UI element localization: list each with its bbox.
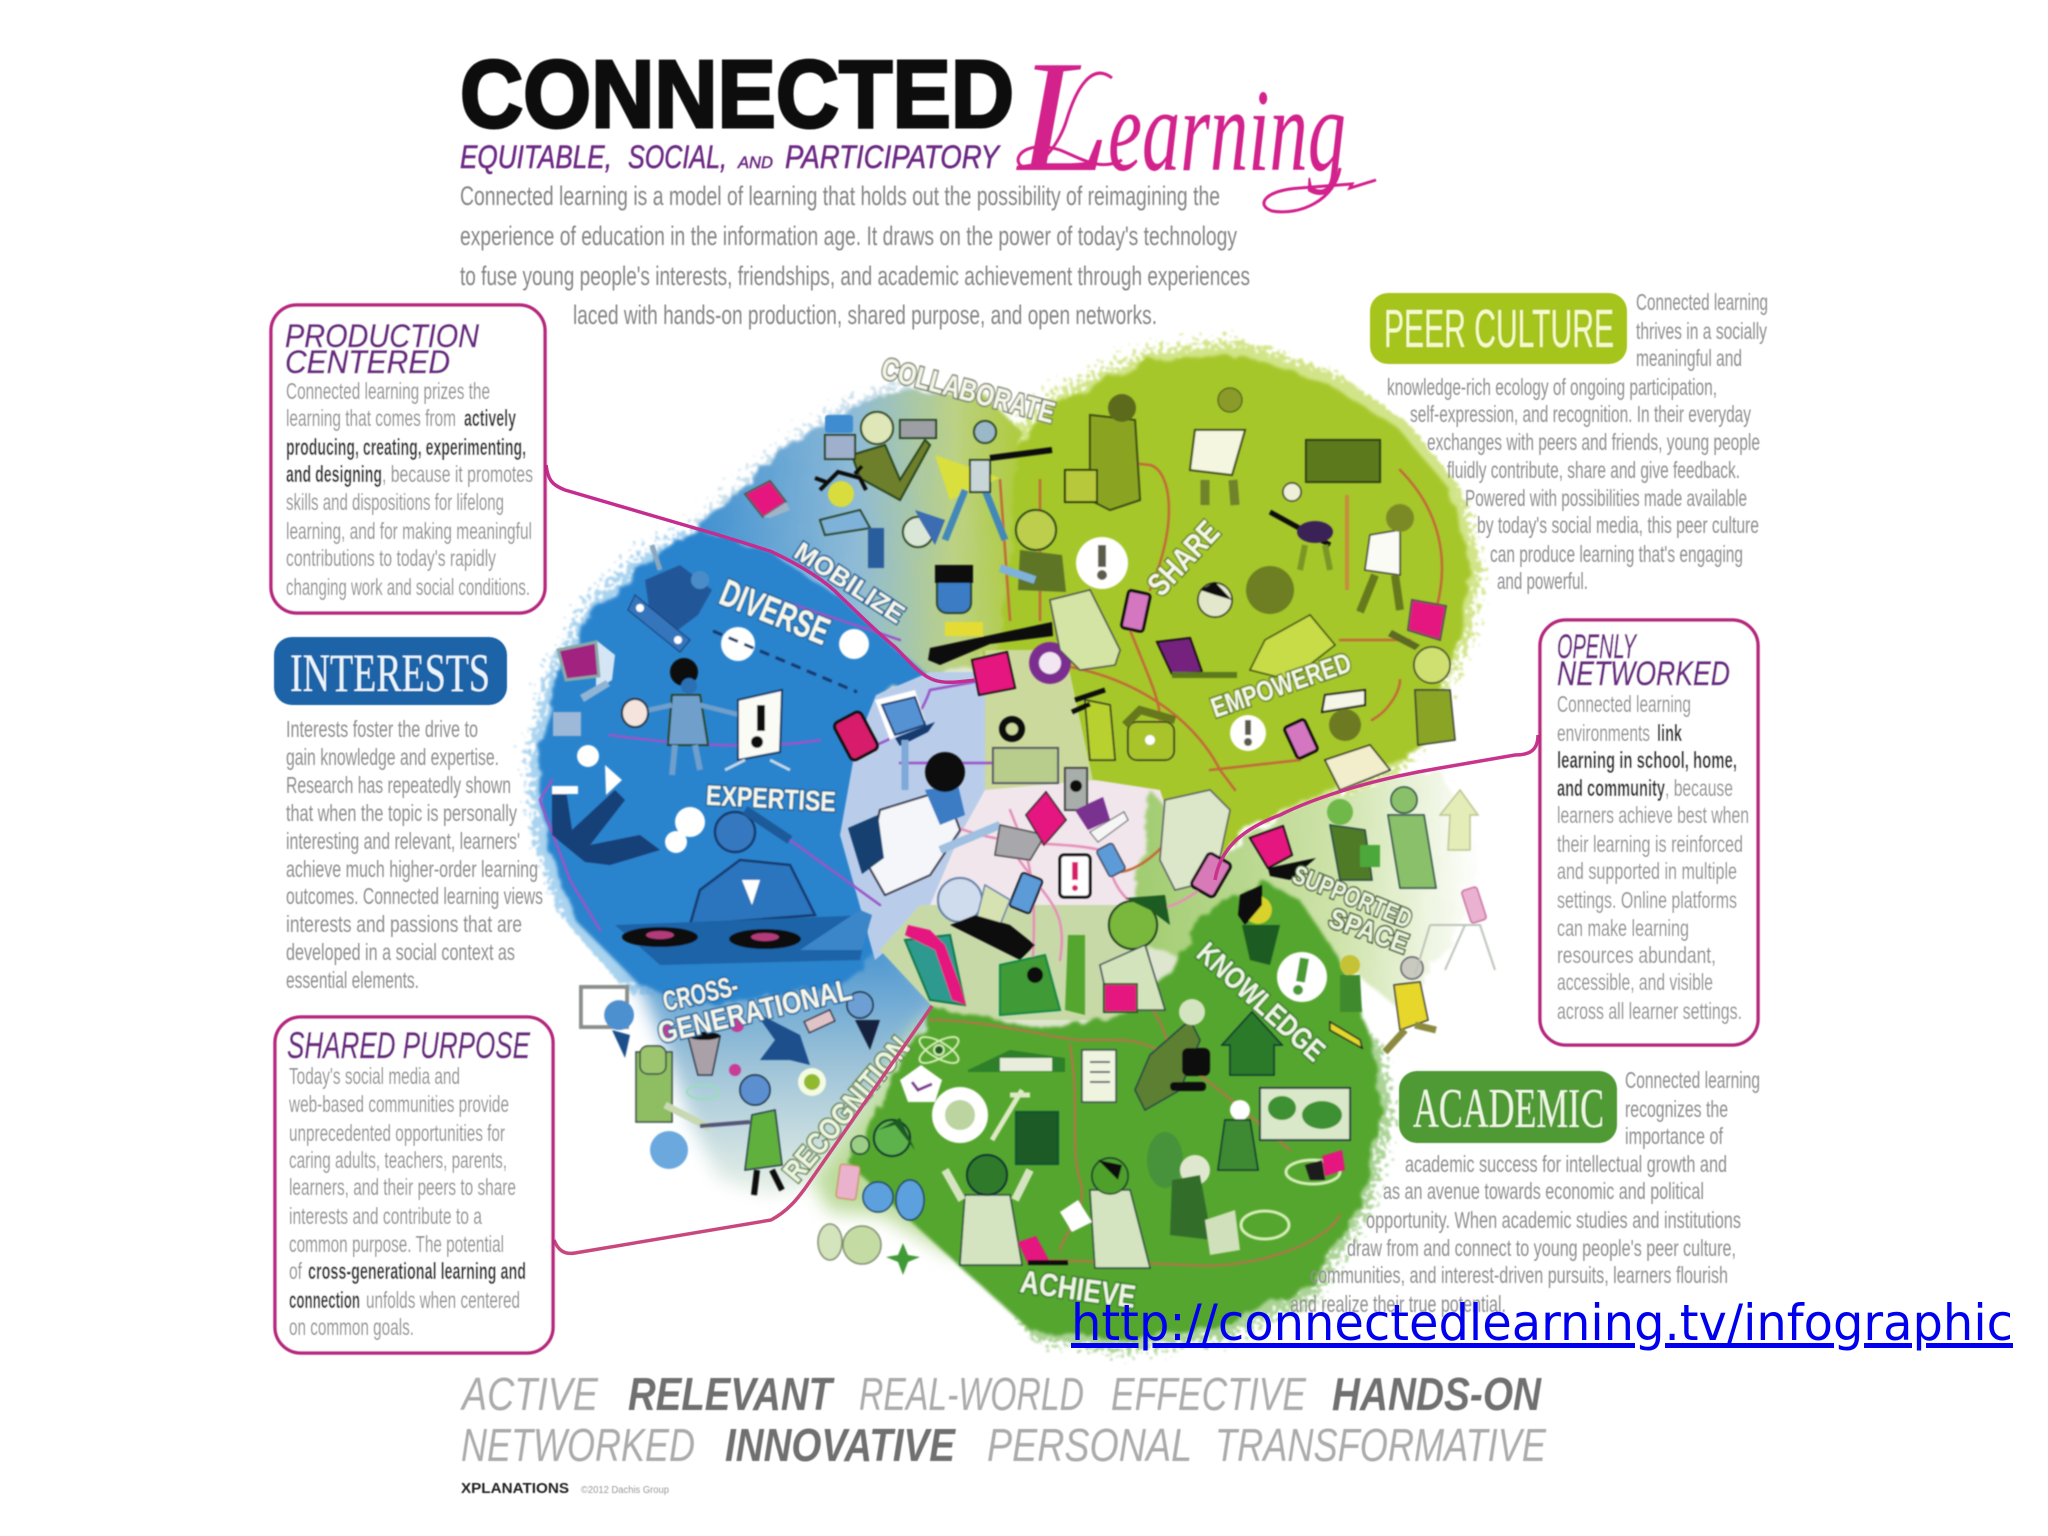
panel: interests pill: INTERESTS	[290, 643, 490, 703]
body text	[286, 378, 533, 600]
figure group: centre mixers and devices	[905, 716, 1170, 1015]
text block: interests: interesting and relevant, learners'	[286, 828, 520, 854]
title: Learning script: earning	[1108, 65, 1346, 196]
figure: artist with black afro	[640, 658, 740, 775]
icon: pink phone yellow lobe	[1121, 590, 1151, 632]
body text	[1557, 691, 1749, 1024]
intro paragraph	[460, 181, 1250, 330]
icon: record	[999, 716, 1025, 742]
icon: pink laptop lower	[1018, 1236, 1068, 1265]
icon: white sun burst	[932, 1087, 988, 1143]
icon: speaker	[1065, 768, 1087, 810]
heading: OPENLY	[1557, 628, 1637, 666]
panel: peer culture pill	[1370, 293, 1627, 364]
intro paragraph: Connected learning is a model of learning that holds out the possibility of reimagining the	[460, 181, 1220, 211]
icon: phone exclamation	[1060, 855, 1090, 897]
keyword row 2: PERSONAL	[987, 1419, 1192, 1471]
icon: white circle	[577, 745, 599, 767]
heading: PRODUCTION	[285, 318, 480, 354]
underlay: pale centre joining the lobes	[830, 640, 1240, 1030]
body text: of	[289, 1258, 302, 1284]
figure: skateboarder upside-down	[628, 545, 712, 652]
text block: academic: and realize their true potential.	[1290, 1291, 1506, 1317]
figure: older man in green shaking hands	[636, 1046, 710, 1128]
figure group: green academic lobe	[818, 984, 1350, 1275]
text block: academic: opportunity. When academic studies and institutions	[1366, 1207, 1741, 1233]
lobe: peer culture yellow-green	[985, 355, 1470, 860]
keyword row 2	[461, 1419, 1547, 1471]
icon: green sun	[798, 1068, 826, 1096]
text block: peer culture: Powered with possibilities made available	[1465, 485, 1747, 511]
body text: actively	[464, 405, 516, 431]
figure: dreadlock head	[1072, 690, 1115, 760]
figure: man with laptop and white shirt	[848, 740, 1000, 895]
lobe: recognition strip pale green	[812, 1015, 960, 1260]
figure: camera operator	[804, 992, 880, 1050]
icon: exclamation bubble yellow lobe	[1076, 537, 1128, 589]
body text	[288, 1063, 526, 1340]
figure: singer white shirt	[1360, 504, 1414, 612]
figure: man with glasses	[1000, 510, 1066, 592]
keyword row 1: REAL-WORLD	[859, 1368, 1084, 1420]
icon: purple laptop centre	[1075, 797, 1128, 842]
icon: pink phone supported space	[1190, 852, 1232, 898]
body text: environments	[1557, 720, 1650, 746]
heading: CENTERED	[285, 344, 450, 380]
text block: interests	[286, 716, 543, 993]
body text: Connected learning prizes the	[286, 378, 490, 404]
body text: common purpose. The potential	[289, 1231, 504, 1257]
label: expertise: EXPERTISE	[705, 780, 837, 817]
icon: atom	[916, 1032, 962, 1068]
text block: interests: gain knowledge and expertise.	[286, 744, 499, 770]
figure: glasses head spiky hair	[1125, 710, 1175, 760]
credit: XPLANATIONS	[461, 1480, 569, 1497]
body text: , because it promotes	[382, 461, 533, 487]
keyword row 1: HANDS-ON	[1332, 1368, 1542, 1420]
body text: interests and contribute to a	[289, 1203, 482, 1229]
body text: can make learning	[1557, 915, 1689, 941]
body text: learning in school, home,	[1557, 747, 1737, 773]
figure: woman with clipboard	[1060, 1158, 1150, 1268]
lobe: centre lower pale green	[880, 905, 1155, 1020]
icon: purple light bulb burst	[1029, 642, 1071, 684]
body text: and supported in multiple	[1557, 858, 1737, 884]
icon: black tablet frame	[950, 915, 1035, 960]
icon: mixer box	[993, 748, 1058, 783]
icon: document scroll	[1082, 1050, 1116, 1102]
figure: camera man olive	[852, 412, 936, 500]
label: diverse: DIVERSE	[714, 572, 835, 654]
panel: production centered	[271, 305, 545, 613]
figure: guitarist with yellow guitar	[935, 421, 1052, 540]
figure: woman face profile	[1050, 590, 1120, 670]
body text: Connected learning	[1557, 691, 1691, 717]
icon: round table lower	[1241, 1211, 1289, 1239]
text block: academic: academic success for intellectual growth and	[1405, 1151, 1727, 1177]
connector lines inside the blue lobe	[540, 600, 1030, 930]
body text: changing work and social conditions.	[286, 574, 530, 600]
icon: long keyboard wedge	[968, 1050, 1065, 1072]
icon: pink phone low	[836, 1164, 860, 1200]
keyword row 1: ACTIVE	[460, 1368, 599, 1420]
figure: hooded person green coat	[1388, 787, 1436, 888]
icon: pink phone far right	[1461, 886, 1487, 924]
text block: academic: communities, and interest-driven pursuits, learners flourish	[1310, 1262, 1728, 1288]
icon: black brush stroke bar	[928, 622, 1053, 665]
body text: accessible, and visible	[1557, 969, 1713, 995]
figure: rabbit with guitar	[1270, 483, 1333, 570]
icon: round table with pink device	[1286, 1150, 1345, 1184]
icon: white clouds and dashed line	[713, 627, 869, 692]
lobe: academic green	[850, 880, 1382, 1340]
credit: ©2012 Dachis Group	[581, 1485, 669, 1496]
subtitle	[460, 139, 1001, 175]
text block: academic	[1290, 1067, 1760, 1317]
label: achieve: ACHIEVE	[1018, 1263, 1138, 1315]
icon: small book	[553, 712, 581, 736]
icon: red phone	[833, 710, 879, 762]
figure: skateboarder on yellow board	[1330, 955, 1362, 1048]
text block: peer culture: fluidly contribute, share and give feedback.	[1447, 457, 1740, 483]
figure: arm with pointing finger	[1065, 935, 1085, 1015]
icon: turntable records	[615, 910, 872, 965]
subtitle: AND	[737, 153, 773, 172]
panel: academic pill	[1399, 1071, 1617, 1143]
lobe halos: spray edges	[528, 340, 1482, 1352]
icon: pink monitor yellow lobe	[1388, 600, 1446, 650]
figure: girl in green dress with blue face	[700, 1075, 782, 1195]
figure: seated students	[1147, 1132, 1240, 1255]
label: mobilize: MOBILIZE	[789, 536, 910, 629]
figure: thumb and face	[851, 1118, 915, 1156]
label: cross-generational: GENERATIONAL	[655, 973, 855, 1050]
icon: pink square screen	[1104, 984, 1137, 1012]
text block: interests: developed in a social context as	[286, 939, 515, 965]
source URL link: http://connectedlearning.tv/infographic	[1071, 1294, 2013, 1352]
body text: connection	[289, 1287, 360, 1313]
icon: dark green blackboard	[1016, 1112, 1058, 1164]
text block: academic: as an avenue towards economic and political	[1383, 1178, 1704, 1204]
text block: interests: interests and passions that are	[286, 911, 522, 937]
figure: bald man	[1414, 647, 1455, 745]
body text: settings. Online platforms	[1557, 887, 1737, 913]
figure group: top-left collaborate band	[745, 412, 1066, 636]
heading: NETWORKED	[1557, 655, 1730, 693]
label: cross-generational	[648, 945, 855, 1050]
connector lines inside the yellow-green lobe	[1000, 460, 1442, 872]
intro paragraph: to fuse young people's interests, friendships, and academic achievement through experiences	[460, 261, 1250, 291]
icon: pink stars	[660, 1018, 744, 1076]
label: cross-generational: CROSS-	[660, 970, 741, 1017]
text block: interests: essential elements.	[286, 967, 419, 993]
icon: green star	[886, 1243, 920, 1275]
figure: woman with black hair	[1238, 885, 1280, 965]
figure: dark hair head	[1198, 582, 1232, 617]
label: recognition: RECOGNITION	[777, 1031, 917, 1188]
body text: learners achieve best when	[1557, 802, 1749, 828]
subtitle: PARTICIPATORY	[785, 139, 1001, 175]
figure: DJ with headphones	[690, 810, 815, 925]
body text: learning, and for making meaningful	[286, 518, 532, 544]
body text: Today's social media and	[289, 1063, 460, 1089]
text block: interests: achieve much higher-order learning	[286, 856, 538, 882]
connector lines inside the green lobe	[930, 1000, 1340, 1266]
icon: blue sun	[650, 1131, 688, 1169]
text block: peer culture: Connected learning	[1636, 289, 1768, 315]
panel: peer culture pill: PEER CULTURE	[1384, 299, 1614, 359]
keyword row 2: NETWORKED	[461, 1419, 695, 1471]
pink connector: openly networked to supported space	[1215, 735, 1538, 880]
figure: big pale face	[1160, 790, 1230, 890]
pink connector: shared purpose to recognition	[554, 1006, 932, 1253]
lobe: upper-left gradient blending blue to green	[695, 388, 1020, 680]
icon: pink square device centre	[972, 652, 1015, 695]
panel: shared purpose	[275, 1017, 553, 1353]
label: share: SHARE	[1140, 514, 1227, 603]
icon: teal monitor with pink zigzag	[905, 925, 966, 1005]
body text: their learning is reinforced	[1557, 831, 1743, 857]
figure: woman with green hair and bag	[1327, 799, 1380, 880]
icon: dark green schoolhouse	[1222, 1012, 1282, 1075]
label: knowledge: KNOWLEDGE	[1190, 937, 1331, 1068]
body text: resources abundant,	[1557, 942, 1716, 968]
text block: peer culture: thrives in a socially	[1636, 318, 1767, 344]
body text: contributions to today's rapidly	[286, 545, 496, 571]
icon: trophy	[687, 1032, 720, 1099]
lobe: centre light blue	[840, 672, 990, 960]
lobe: interests blue	[538, 529, 934, 1005]
text block: peer culture: self-expression, and recognition. In their everyday	[1410, 401, 1751, 427]
icon: blue phone	[1009, 872, 1043, 914]
panel: interests pill	[274, 637, 507, 705]
title: CONNECTED: CONNECTED	[460, 41, 1014, 148]
figure: blue hair head	[868, 510, 945, 568]
figure group: lower-left recognition	[581, 987, 880, 1195]
text block: academic: Connected learning	[1625, 1067, 1760, 1093]
figure: pale blue head	[938, 878, 1010, 925]
body text: unprecedented opportunities for	[289, 1120, 505, 1146]
text block: peer culture: by today's social media, this peer culture	[1477, 512, 1759, 538]
panel: openly networked	[1540, 620, 1758, 1045]
figure group: blue lobe	[552, 545, 1000, 965]
figure: person lying with white hair	[552, 765, 705, 865]
title: Learning script	[1016, 27, 1376, 212]
text block: peer culture	[1387, 289, 1768, 594]
body text: web-based communities provide	[288, 1091, 509, 1117]
icon: certificate frame and ribbon	[581, 987, 634, 1058]
body text: and designing	[286, 461, 382, 487]
figure: yellow head with black dreadlocks	[815, 466, 870, 535]
keyword row 2: TRANSFORMATIVE	[1215, 1419, 1547, 1471]
text block: academic: importance of	[1625, 1123, 1723, 1149]
body text: across all learner settings.	[1557, 998, 1742, 1024]
body text: producing, creating, experimenting,	[286, 434, 526, 460]
subtitle: EQUITABLE,	[460, 139, 612, 175]
heading	[285, 318, 480, 380]
body text: , because	[1665, 775, 1733, 801]
heading: SHARED PURPOSE	[287, 1025, 531, 1066]
body text: learners, and their peers to share	[289, 1174, 516, 1200]
figure: blue face with black flat-top	[935, 565, 983, 636]
icon: dark blue star burst	[755, 1012, 810, 1065]
body text: and community	[1557, 775, 1665, 801]
figure: man with white cap and phone	[1284, 690, 1390, 790]
figure: green person with headset	[1000, 955, 1060, 1015]
text block: interests: Interests foster the drive to	[286, 716, 478, 742]
keyword row 1: RELEVANT	[628, 1368, 835, 1420]
keyword row 2: INNOVATIVE	[725, 1419, 956, 1471]
text block: interests: that when the topic is personally	[286, 800, 517, 826]
icon: pink laptop top-left	[745, 481, 790, 518]
figure: curly haired woman typing	[1246, 566, 1335, 680]
figure group: yellow-green lobe	[1050, 388, 1455, 790]
text block: interests: Research has repeatedly shown	[286, 772, 511, 798]
body text: skills and dispositions for lifelong	[286, 489, 504, 515]
body text: on common goals.	[289, 1314, 414, 1340]
lobe: supported space pale	[1130, 770, 1480, 1010]
label: collaborate: COLLABORATE	[878, 352, 1058, 430]
title: Learning script: L	[1016, 27, 1110, 205]
lobe: lower-left pale fade under blue	[630, 930, 945, 1195]
icon: easel with exclamation	[725, 690, 790, 770]
label: empowered: EMPOWERED	[1207, 647, 1355, 724]
figure: long-haired woman with bag	[1065, 394, 1140, 510]
icon: small blue phone right	[1096, 843, 1126, 877]
keyword row 1	[460, 1368, 1542, 1420]
figure: teacher in grey robe	[1218, 1100, 1258, 1170]
icon: tree sign	[1440, 790, 1478, 850]
body text: unfolds when centered	[366, 1287, 520, 1313]
label: supported space: SPACE	[1325, 902, 1413, 959]
text block: interests: outcomes. Connected learning views	[286, 883, 543, 909]
text block: peer culture: and powerful.	[1497, 568, 1588, 594]
heading	[1557, 628, 1730, 693]
icon: exclamation bubble empowered	[1230, 715, 1266, 751]
keyword row 1: EFFECTIVE	[1111, 1368, 1307, 1420]
icon: hammer pencil	[992, 1090, 1030, 1140]
credit	[461, 1480, 669, 1497]
icon: microphone stand	[1345, 495, 1349, 590]
icon: white hexagon with check	[900, 1065, 942, 1102]
icon: magenta monitor	[558, 640, 615, 702]
figure: fist and green face bottom-left	[818, 1224, 881, 1264]
text block: peer culture: meaningful and	[1636, 345, 1742, 371]
icon: world map	[1260, 1088, 1350, 1140]
figure: man in white lab coat	[945, 1155, 1030, 1265]
text block: academic: recognizes the	[1625, 1096, 1728, 1122]
figure group: supported space	[1160, 787, 1495, 1052]
body text: cross-generational learning and	[308, 1258, 526, 1284]
body text: caring adults, teachers, parents,	[289, 1147, 507, 1173]
illustration: four-lobed clover of connected learning	[528, 340, 1538, 1352]
lobe: centre pale green	[985, 650, 1095, 800]
figure: green punk head	[1100, 895, 1170, 1010]
icon: purple laptop yellow lobe	[1157, 638, 1237, 678]
icon: exclamation bubble knowledge	[1277, 952, 1327, 1002]
icon: swing set	[1415, 925, 1495, 975]
icon: dark green board	[1306, 440, 1380, 482]
label: supported space: SUPPORTED	[1288, 859, 1416, 934]
text block: peer culture: knowledge-rich ecology of ongoing participation,	[1387, 374, 1717, 400]
intro paragraph: laced with hands-on production, shared purpose, and open networks.	[573, 300, 1157, 330]
figure: seated person on black chair	[1135, 999, 1210, 1110]
text block: peer culture: can produce learning that's engaging	[1490, 541, 1743, 567]
icon: blue headset box	[825, 415, 855, 459]
body text: link	[1657, 720, 1682, 746]
text block: academic: draw from and connect to young people's peer culture,	[1347, 1235, 1736, 1261]
intro paragraph: experience of education in the information age. It draws on the power of today's technology	[460, 221, 1237, 251]
icon: open laptop with white burst	[875, 690, 935, 746]
icon: palette	[622, 699, 648, 727]
pink connector lines inside the white centre	[940, 810, 1210, 1000]
body text: learning that comes from	[286, 405, 456, 431]
figure: yellow-shirt runner	[1385, 957, 1436, 1052]
pink connector: production centered to centre	[546, 465, 975, 682]
panel: academic pill: ACADEMIC	[1413, 1078, 1604, 1140]
lobe: centre white pink	[928, 780, 1180, 910]
icon: pink laptop supported space	[1250, 826, 1316, 880]
figure: two blue heads	[863, 1180, 924, 1220]
icon: pink laptop centre	[995, 792, 1066, 860]
subtitle: SOCIAL,	[628, 139, 727, 175]
text block: peer culture: exchanges with peers and friends, young people	[1427, 429, 1760, 455]
figure: girl with white dress	[1190, 388, 1245, 505]
